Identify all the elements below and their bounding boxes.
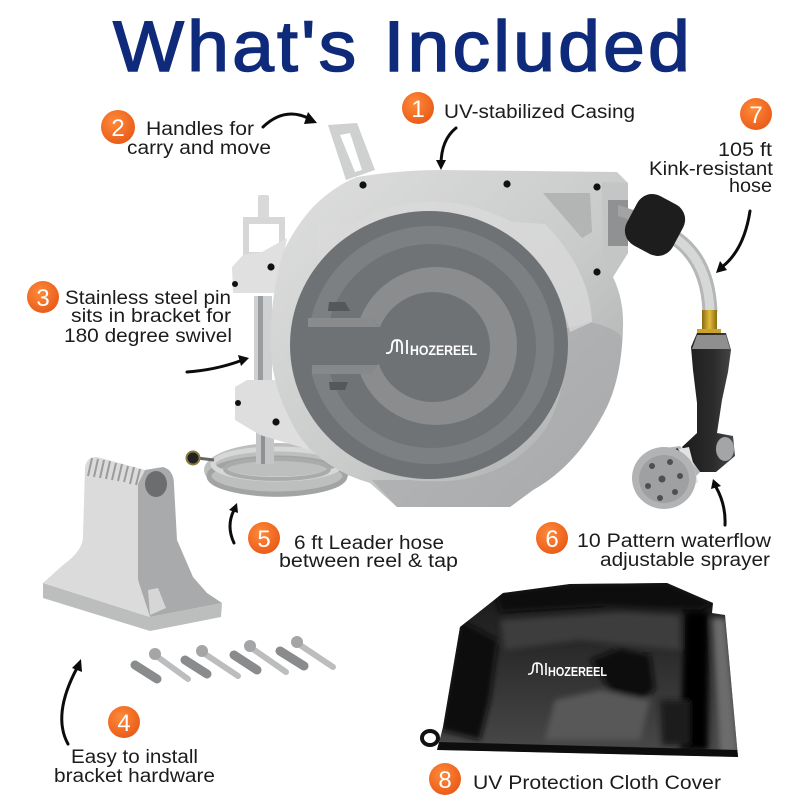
hub bar bbox=[308, 318, 392, 373]
bracket light face bbox=[43, 457, 150, 617]
light ring bbox=[308, 226, 554, 464]
bracket hardware: screws and anchors bbox=[135, 636, 333, 679]
outer casing bbox=[270, 170, 628, 507]
leader hose coil bbox=[186, 443, 350, 497]
logo: HOZEREEL bbox=[410, 343, 477, 358]
hub circle bbox=[376, 292, 490, 402]
badge 7 bbox=[740, 98, 772, 130]
brass fitting bbox=[697, 310, 721, 333]
anchors bbox=[135, 651, 304, 679]
product: hose and sprayer bbox=[618, 188, 735, 509]
label 2: Handles for bbox=[146, 119, 255, 140]
sprayer head bbox=[632, 446, 700, 509]
label 2: carry and move bbox=[127, 138, 271, 159]
badge 5: 5 bbox=[257, 526, 271, 553]
badge 4: 4 bbox=[117, 710, 131, 737]
callout 5: leader hose bbox=[229, 503, 458, 572]
screws bbox=[155, 643, 333, 679]
arrow 1 bbox=[436, 128, 456, 170]
badge 6 bbox=[536, 522, 568, 554]
lighter shoulder bbox=[318, 202, 592, 332]
badge 2 bbox=[101, 110, 135, 144]
kink-resistant hose bbox=[672, 236, 710, 312]
bracket ribs bbox=[88, 458, 140, 485]
label 5 bbox=[279, 533, 458, 572]
arrow 6 bbox=[711, 479, 725, 525]
badge 3 bbox=[27, 281, 59, 313]
label 7: hose bbox=[729, 176, 772, 197]
grip side dial bbox=[716, 437, 734, 461]
hose swivel connector bbox=[618, 205, 640, 222]
black knob bbox=[619, 188, 691, 262]
badge 6: 6 bbox=[545, 526, 559, 553]
arrow 5 bbox=[229, 503, 238, 543]
cover logo bbox=[528, 663, 607, 679]
bracket foot facet bbox=[148, 588, 166, 615]
arrow 7 bbox=[716, 211, 750, 273]
cover drawcord toggle bbox=[422, 731, 438, 745]
casing lower shading bbox=[372, 322, 622, 507]
label 3 bbox=[64, 288, 232, 347]
label 5: 6 ft Leader hose bbox=[294, 533, 444, 554]
reel carry handle bbox=[328, 123, 375, 180]
label 7: Kink-resistant bbox=[649, 159, 774, 180]
cover hem bbox=[437, 742, 738, 757]
cover folds bbox=[437, 583, 738, 757]
label 3: sits in bracket for bbox=[71, 306, 232, 327]
ring notches bbox=[328, 302, 350, 390]
title: What's Included bbox=[113, 8, 693, 87]
arrow 4 bbox=[62, 659, 82, 744]
callout 7: hose bbox=[649, 98, 774, 273]
cover logo: HOZEREEL bbox=[548, 665, 607, 679]
badge 5 bbox=[248, 522, 280, 554]
badge 7: 7 bbox=[749, 102, 763, 129]
arrow 2 bbox=[263, 112, 317, 127]
label 3: 180 degree swivel bbox=[64, 326, 232, 347]
label 1: UV-stabilized Casing bbox=[444, 102, 635, 123]
badge 8 bbox=[429, 763, 461, 795]
badge 4 bbox=[108, 706, 140, 738]
label 4: bracket hardware bbox=[54, 766, 215, 787]
label 2 bbox=[127, 119, 271, 159]
bracket shaded face bbox=[138, 467, 222, 617]
bracket pin hole bbox=[145, 471, 167, 497]
casing right panel bbox=[543, 193, 592, 238]
sprayer grip bbox=[682, 333, 735, 472]
callout 3: swivel pin bbox=[27, 281, 249, 372]
label 5: between reel & tap bbox=[279, 551, 458, 572]
label 6: adjustable sprayer bbox=[600, 550, 771, 571]
bracket base front bbox=[43, 583, 222, 631]
label 4 bbox=[54, 747, 215, 787]
bracket arms bbox=[232, 238, 287, 293]
badge 8: 8 bbox=[438, 767, 452, 794]
callout 8: cover bbox=[429, 763, 722, 795]
label 3: Stainless steel pin bbox=[65, 288, 231, 309]
stainless steel pin bbox=[254, 296, 274, 464]
callout 4: bracket hardware bbox=[54, 659, 215, 787]
product: cloth cover bbox=[422, 583, 738, 757]
label 8: UV Protection Cloth Cover bbox=[473, 773, 722, 794]
callout 1: casing bbox=[402, 92, 635, 170]
product: wall bracket bbox=[43, 457, 222, 631]
cover body bbox=[437, 583, 738, 757]
label 7: 105 ft bbox=[718, 140, 773, 161]
callout 2: handles bbox=[101, 110, 317, 159]
label 7 bbox=[649, 140, 774, 197]
tap connector bbox=[243, 195, 285, 256]
label 4: Easy to install bbox=[71, 747, 198, 768]
callout 6: sprayer bbox=[536, 479, 771, 571]
logo bbox=[386, 340, 477, 358]
screw heads bbox=[149, 636, 303, 660]
label 6 bbox=[577, 531, 771, 571]
dark outer ring bbox=[290, 211, 568, 479]
inner ring bbox=[355, 267, 517, 425]
badge 1 bbox=[402, 92, 434, 124]
badge 1: 1 bbox=[411, 96, 425, 123]
arrow 3 bbox=[187, 355, 249, 372]
groove ring bbox=[326, 244, 536, 448]
badge 3: 3 bbox=[36, 285, 50, 312]
badge 2: 2 bbox=[111, 115, 125, 142]
product: hose reel bbox=[186, 123, 628, 507]
label 6: 10 Pattern waterflow bbox=[577, 531, 771, 552]
casing screws bbox=[232, 180, 601, 426]
